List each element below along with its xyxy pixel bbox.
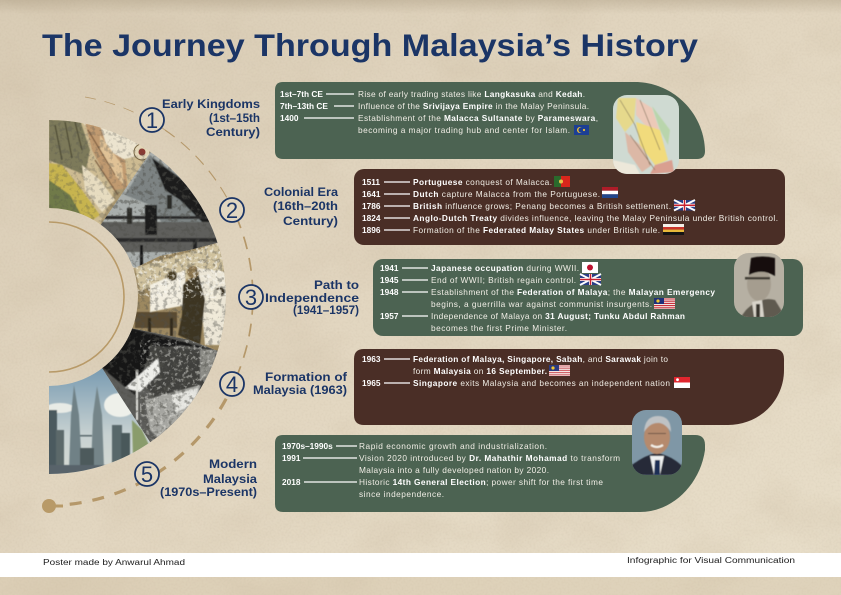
panel: early kingdoms: Rise of early trading states like Langkasuka and Kedah.	[358, 89, 585, 99]
heading: Colonial Era: Colonial Era	[264, 185, 338, 199]
panel: colonial era: 1896	[362, 225, 381, 235]
panel: path to independence: Japanese occupation during WWII.	[431, 263, 579, 273]
heading: Path to Independence: Path to	[314, 278, 359, 292]
panel: colonial era: 1641	[362, 189, 381, 199]
panel: colonial era: Formation of the Federated Malay States under British rule.	[413, 225, 660, 235]
heading: Path to Independence	[265, 278, 359, 317]
heading: Colonial Era: (16th–20th	[273, 199, 338, 213]
panel: path to independence: 1941	[380, 263, 399, 273]
flag: Portugal	[554, 176, 570, 187]
heading: Formation of Malaysia: Malaysia (1963)	[253, 383, 347, 397]
flag: Japan	[582, 262, 598, 273]
panel: colonial era: Anglo-Dutch Treaty divides influence, leaving the Malay Peninsula under British control.	[413, 213, 778, 223]
title: The Journey Through Malaysia’s History	[42, 27, 699, 63]
panel: formation of Malaysia	[354, 349, 784, 425]
section 2 number	[220, 198, 244, 223]
section 3 number	[239, 285, 263, 310]
panel: path to independence: Independence of Malaya on 31 August; Tunku Abdul Rahman	[431, 311, 685, 321]
panel: formation of Malaysia: 1965	[362, 378, 381, 388]
panel: colonial era: 1786	[362, 201, 381, 211]
heading: Early Kingdoms	[162, 97, 260, 139]
panel: early kingdoms: becoming a major trading hub and center for Islam.	[358, 125, 570, 135]
heading: Modern Malaysia: Malaysia	[203, 472, 257, 486]
flag: United Kingdom	[674, 200, 695, 210]
flag: Federated Malay States	[663, 224, 684, 235]
heading: Modern Malaysia: (1970s–Present)	[160, 485, 257, 499]
panel: path to independence	[373, 259, 803, 336]
panel: formation of Malaysia: Singapore exits Malaysia and becomes an independent nation	[413, 378, 670, 388]
photo: formation crowd	[102, 328, 218, 442]
panel: early kingdoms: Influence of the Srivijaya Empire in the Malay Peninsula.	[358, 101, 589, 111]
footer credit: Poster made by Anwarul Ahmad	[43, 558, 185, 567]
flag: United Kingdom	[580, 274, 601, 285]
image: portrait of Mahathir Mohamad	[632, 410, 682, 475]
panel: formation of Malaysia: 1963	[362, 354, 381, 364]
heading: Modern Malaysia	[160, 457, 257, 499]
heading: Colonial Era: Century)	[283, 214, 338, 228]
section 4 number: 4	[226, 372, 238, 397]
panel: early kingdoms	[275, 82, 705, 159]
end dot	[42, 499, 63, 513]
heading: Formation of Malaysia	[253, 370, 348, 397]
heading: Early Kingdoms: Century)	[206, 125, 260, 139]
footer caption: Infographic for Visual Communication	[627, 556, 795, 565]
panel: colonial era: Portuguese conquest of Malacca.	[413, 177, 552, 187]
panel: early kingdoms: 1st–7th CE	[280, 89, 323, 99]
panel: colonial era: 1824	[362, 213, 381, 223]
section 5 number: 5	[141, 462, 153, 487]
flag: Malaysia	[654, 298, 675, 309]
heading: Colonial Era	[264, 185, 338, 228]
section 2 number: 2	[226, 198, 238, 223]
panel: formation of Malaysia: form Malaysia on 16 September.	[413, 366, 547, 376]
section 4 number	[220, 372, 244, 397]
panel: modern Malaysia: 1970s–1990s	[282, 441, 333, 451]
panel: modern Malaysia: 2018	[282, 477, 301, 487]
heading: Early Kingdoms: Early Kingdoms	[162, 97, 260, 111]
panel: modern Malaysia: since independence.	[359, 489, 444, 499]
panel: colonial era	[354, 169, 785, 245]
section 1 number: 1	[146, 108, 158, 133]
panel: path to independence: begins, a guerrilla war against communist insurgents.	[431, 299, 652, 309]
panel: modern Malaysia: Vision 2020 introduced by Dr. Mahathir Mohamad to transform	[359, 453, 620, 463]
photo: independence proclamation	[132, 242, 226, 350]
panel: path to independence: End of WWII; British regain control.	[431, 275, 576, 285]
flag: Malacca	[574, 125, 589, 135]
heading: Formation of Malaysia: Formation of	[265, 370, 348, 384]
heading: Early Kingdoms: (1st–15th	[209, 111, 260, 125]
flag: Netherlands	[602, 187, 618, 198]
panel: early kingdoms: 1400	[280, 113, 299, 123]
image: map of Malaya	[613, 95, 679, 174]
panel: early kingdoms: 7th–13th CE	[280, 101, 328, 111]
panel: modern Malaysia: Rapid economic growth and industrialization.	[359, 441, 547, 451]
panel: modern Malaysia: Malaysia into a fully developed nation by 2020.	[359, 465, 549, 475]
panel: modern Malaysia	[275, 435, 705, 512]
dashed timeline arc	[62, 97, 253, 505]
flag: Singapore	[674, 377, 690, 388]
panel: colonial era: Dutch capture Malacca from the Portuguese.	[413, 189, 600, 199]
photo: antique map	[49, 120, 150, 225]
photo fan	[49, 120, 226, 474]
heading: Path to Independence: Independence	[265, 291, 359, 305]
section 1 number	[140, 108, 164, 133]
panel: path to independence: 1957	[380, 311, 399, 321]
panel: modern Malaysia: Historic 14th General Election; power shift for the first time	[359, 477, 603, 487]
section 5 number	[135, 462, 159, 487]
section 3 number: 3	[245, 285, 257, 310]
inner tan arc	[49, 222, 124, 372]
flag: Malaysia	[549, 365, 570, 376]
panel: path to independence: Establishment of the Federation of Malaya; the Malayan Emergency	[431, 287, 715, 297]
photo: Petronas Towers skyline	[49, 368, 150, 474]
panel: colonial era: British influence grows; Penang becomes a British settlement.	[413, 201, 671, 211]
footer band	[0, 553, 841, 577]
heading: Path to Independence: (1941–1957)	[293, 303, 359, 317]
panel: path to independence: 1948	[380, 287, 399, 297]
photo: colonial era ship	[101, 152, 218, 268]
image: portrait of Tunku Abdul Rahman	[734, 253, 786, 318]
panel: colonial era: 1511	[362, 177, 380, 187]
heading: Modern Malaysia: Modern	[209, 457, 257, 471]
panel: path to independence: 1945	[380, 275, 399, 285]
panel: formation of Malaysia: Federation of Malaya, Singapore, Sabah, and Sarawak join to	[413, 354, 668, 364]
panel: early kingdoms: Establishment of the Malacca Sultanate by Parameswara,	[358, 113, 598, 123]
panel: path to independence: becomes the first Prime Minister.	[431, 323, 567, 333]
panel: modern Malaysia: 1991	[282, 453, 301, 463]
